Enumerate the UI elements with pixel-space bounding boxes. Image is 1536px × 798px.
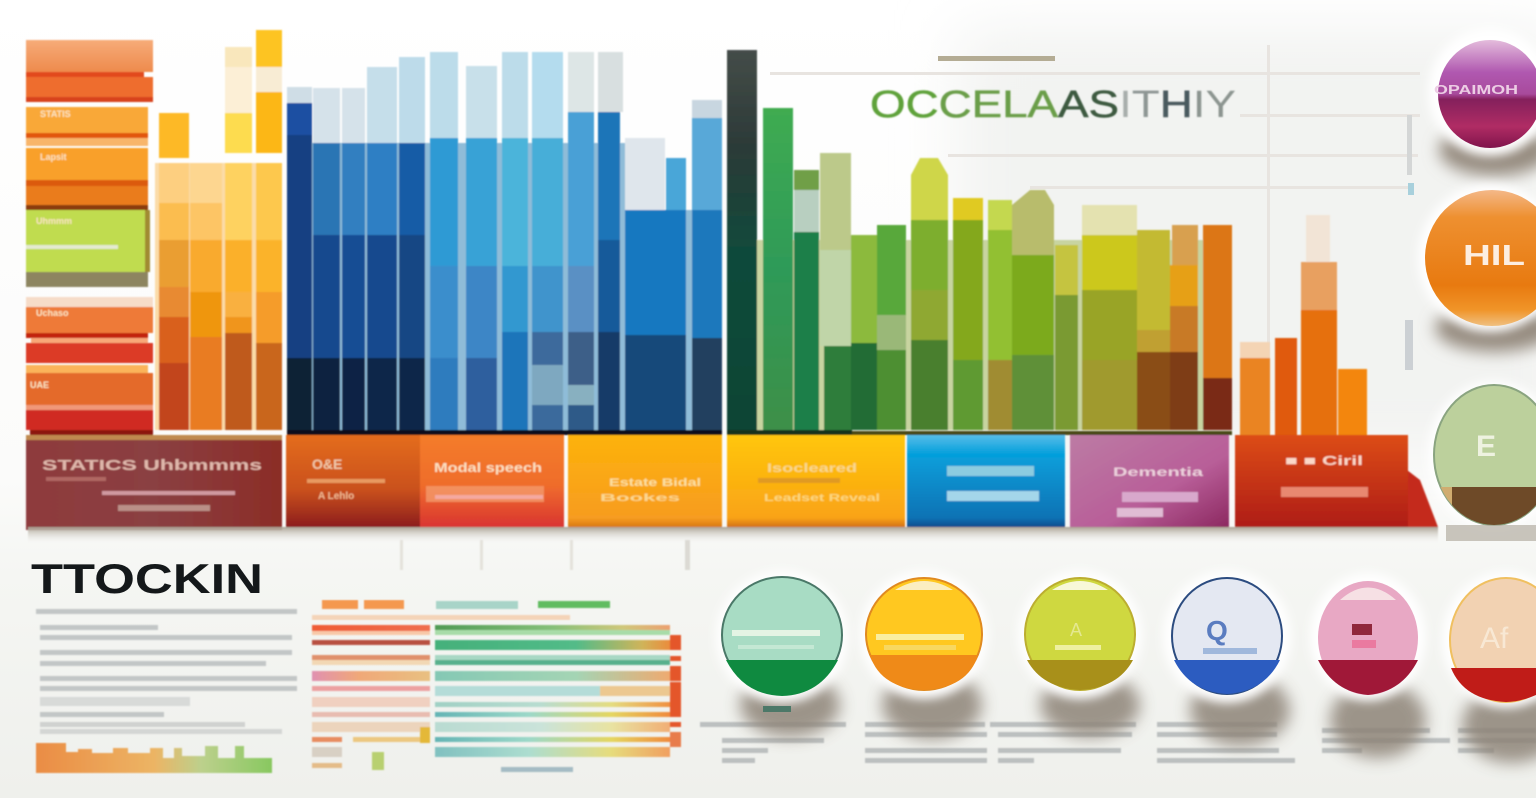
circle: pink xyxy=(1310,573,1426,758)
band shadow xyxy=(28,527,1438,570)
band: orange red: O&E xyxy=(312,456,342,472)
band: purple xyxy=(1070,435,1229,527)
band: blue xyxy=(907,435,1065,527)
band: brown: STATICS Uhbmmms xyxy=(42,457,262,474)
band: purple: Dementia xyxy=(1113,465,1204,479)
stack labels: STATIS xyxy=(40,109,71,119)
mini bar chart xyxy=(36,743,272,773)
band: amber xyxy=(568,435,722,527)
circle: orange red xyxy=(1442,572,1536,763)
chart: green to orange bars xyxy=(727,50,1367,435)
band: red xyxy=(1235,435,1438,527)
circle: blue white xyxy=(1163,571,1291,746)
circle: orange xyxy=(1418,184,1536,352)
circle: orange red: Af xyxy=(1480,622,1509,655)
right bars xyxy=(435,625,670,772)
band: yellow: Leadset Reveal xyxy=(764,493,880,504)
panel: label band xyxy=(26,435,1438,570)
circle: purple xyxy=(1428,28,1536,176)
stack labels xyxy=(30,109,72,390)
left bars xyxy=(312,625,430,770)
band: brown xyxy=(26,435,282,530)
band: amber: Estate Bidal xyxy=(609,477,701,489)
circle: purple: OPAIMOH xyxy=(1434,82,1518,97)
title: OC CELA AS ITHIY xyxy=(870,84,1236,126)
chart: blue bars xyxy=(287,52,722,435)
chart: horizontal bars xyxy=(312,625,681,772)
stack labels: UAE xyxy=(30,380,49,390)
circle: green: E xyxy=(1476,430,1496,463)
right ticks xyxy=(670,635,681,747)
band: red: ■ ■ Ciril xyxy=(1285,453,1363,468)
circle: blue white: Q xyxy=(1206,615,1228,646)
stack labels: Uchaso xyxy=(36,308,69,318)
band: yellow: Isocleared xyxy=(767,461,857,475)
text block xyxy=(36,609,297,734)
band: yellow xyxy=(727,435,905,527)
panel: left stacked block xyxy=(26,40,153,435)
circle: green xyxy=(716,571,848,737)
bottom circles xyxy=(716,571,1536,763)
circle: lime: A xyxy=(1070,620,1082,640)
bottom circle captions xyxy=(700,722,1536,763)
stack labels: Uhmmm xyxy=(36,216,72,226)
grid lines and title decoration xyxy=(770,45,1420,440)
circle: orange: HIL xyxy=(1463,240,1525,272)
band: amber: Bookes xyxy=(600,493,681,504)
chart: yellow orange bars xyxy=(155,30,282,430)
band: orange red xyxy=(286,435,420,527)
circle: lime xyxy=(1018,571,1142,737)
stack labels: Lapsit xyxy=(40,152,67,162)
circle: green xyxy=(1428,381,1536,541)
band: orange xyxy=(420,435,564,527)
legend xyxy=(312,600,610,620)
band: orange: Modal speech xyxy=(434,460,542,475)
circle: amber xyxy=(860,571,988,739)
bottom left title: TTOCKIN xyxy=(31,555,263,602)
right circles xyxy=(1418,28,1536,541)
band: orange red: A Lehlo xyxy=(318,491,354,502)
